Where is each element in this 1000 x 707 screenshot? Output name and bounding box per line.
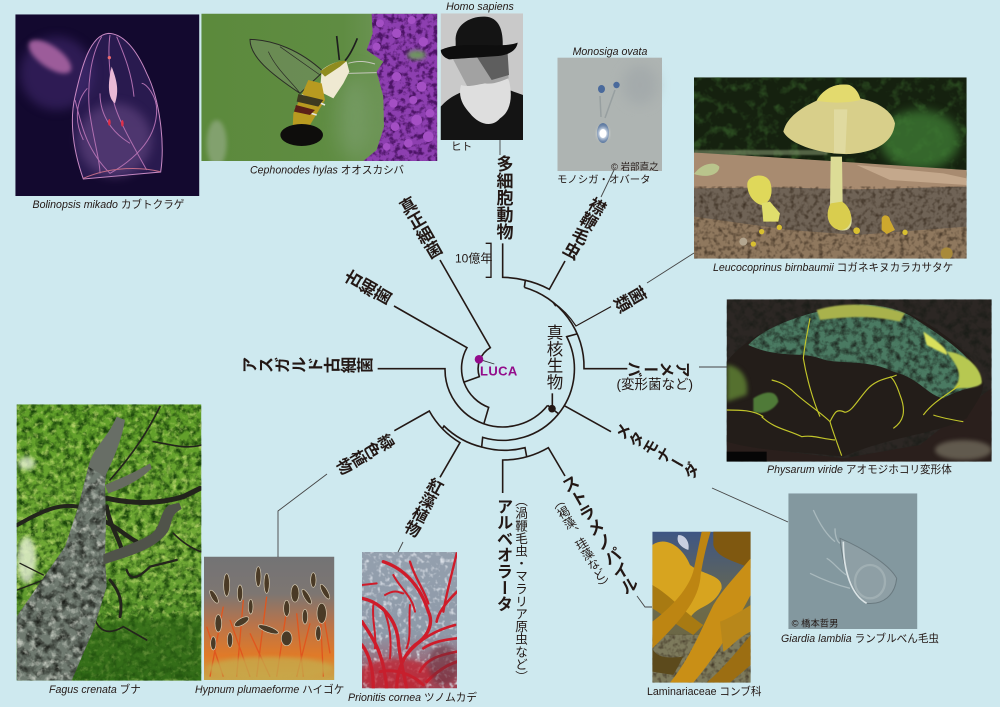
caption: Prionitis cornea: Prionitis cornea ツノムカデ [348, 691, 477, 704]
label: 紅藻植物: 紅藻植物 [399, 474, 446, 540]
node: LUCA [475, 355, 483, 364]
photo: slime mould Physarum viride [727, 299, 992, 462]
label: 緑色植物: 緑色植物 [332, 428, 398, 477]
leader lines [278, 140, 788, 607]
caption: Monosiga ovata: Monosiga ovata [573, 46, 648, 58]
caption: Bolinopsis mikado: Bolinopsis mikado カブトクラゲ [32, 198, 185, 211]
caption: Giardia lamblia: Giardia lamblia ランブルべん毛虫 [781, 632, 939, 645]
caption: Laminariaceae: Laminariaceae コンブ科 [647, 685, 762, 698]
label: 真核生物: 真核生物 [544, 324, 563, 390]
label: 多細胞動物: 多細胞動物 [494, 154, 513, 241]
photo: hawk moth Cephonodes hylas [201, 14, 437, 167]
credit: 岩部直之: © 岩部直之 [611, 161, 659, 173]
label: (渦鞭毛虫・マラリア原虫など): （渦鞭毛虫・マラリア原虫など） [513, 494, 527, 683]
caption: Fagus crenata: Fagus crenata ブナ [49, 683, 141, 696]
caption: Leucocoprinus birnbaumii: Leucocoprinus birnbaumii コガネキヌカラカサタケ [713, 262, 953, 274]
label: 襟鞭毛虫: 襟鞭毛虫 [557, 193, 609, 263]
photo: moss Hypnum plumaeforme [204, 557, 334, 680]
label: 古細菌: 古細菌 [340, 267, 394, 310]
label: 菌類: 菌類 [610, 281, 649, 315]
caption: Homo sapiens: Homo sapiens [446, 1, 515, 13]
label: アスガルド古細菌: アスガルド古細菌 [241, 357, 373, 376]
label: LUCA: LUCA [480, 364, 518, 378]
phylogenetic tree [378, 243, 627, 493]
photo: mushroom Leucocoprinus birnbaumii [694, 77, 967, 259]
label: アルベオラータ: アルベオラータ [494, 498, 513, 612]
credit: 橋本哲男: © 橋本哲男 [792, 618, 838, 629]
photo: Giardia lamblia micrograph [788, 493, 917, 629]
label: 真正細菌: 真正細菌 [394, 194, 445, 263]
caption: モノシガ・オバータ: モノシガ・オバータ [557, 174, 651, 186]
label: 10億年 scale: 10億年 [455, 252, 492, 266]
photo: comb jelly Bolinopsis mikado [15, 14, 199, 196]
photo: Darwin portrait (Homo sapiens) [441, 13, 523, 140]
label: (褐藻、珪藻など): （褐藻、珪藻など） [548, 494, 614, 594]
caption: Hypnum plumaeforme: Hypnum plumaeforme ハイゴケ [195, 683, 344, 696]
caption: ヒト: ヒト [451, 141, 472, 153]
label: アメーバ: アメーバ [627, 358, 691, 378]
photo: kelp Laminariaceae [652, 532, 751, 683]
caption: Cephonodes hylas: Cephonodes hylas オオスカシバ [250, 164, 404, 176]
caption: Physarum viride: Physarum viride アオモジホコリ変形体 [767, 463, 952, 476]
node: eukaryote common ancestor [548, 405, 556, 413]
label: ストラメノパイル: ストラメノパイル [557, 472, 641, 598]
label: (変形菌など): (変形菌など) [616, 377, 693, 392]
photo: Monosiga ovata micrograph [558, 58, 662, 173]
photo: beech tree Fagus crenata [17, 404, 202, 681]
label: メタモナーダ: メタモナーダ [611, 421, 702, 484]
photo: red alga Prionitis cornea [360, 552, 458, 692]
